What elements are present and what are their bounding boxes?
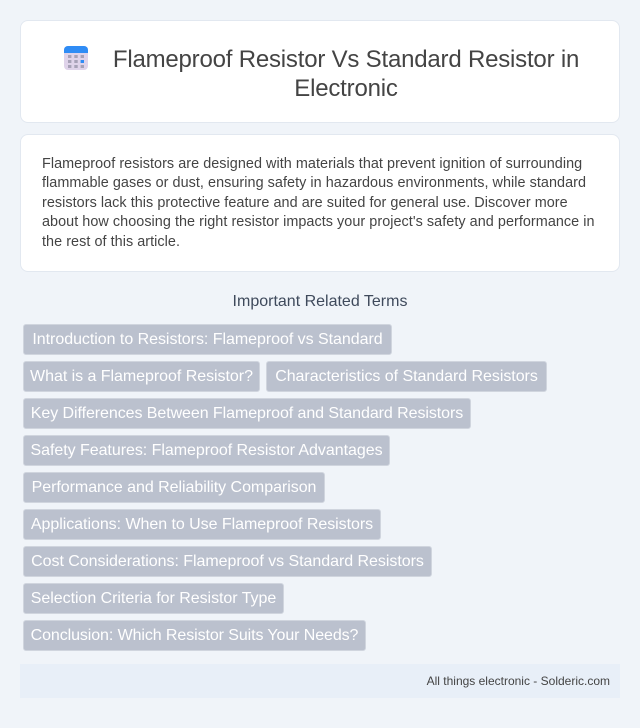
panel: description xyxy=(20,134,620,272)
tag xyxy=(23,509,381,540)
heading: related terms: Important Related Terms xyxy=(233,293,407,310)
panel: header xyxy=(20,20,620,123)
footer: All things electronic - Solderic.com xyxy=(427,674,610,688)
title: Flameproof Resistor Vs Standard Resistor in xyxy=(113,46,579,73)
icon: calendar xyxy=(64,46,88,70)
tag xyxy=(23,472,325,503)
text block: description: Flameproof resistors are designed with materials that prevent ignition of surrounding xyxy=(42,156,582,172)
title: Electronic xyxy=(294,75,398,102)
text block: description: about how choosing the right resistor impacts your project's safety and performance in xyxy=(42,214,595,230)
text block: description: the rest of this article. xyxy=(42,234,180,250)
tag xyxy=(23,324,392,355)
tag: What is a Flameproof Resistor? xyxy=(30,368,253,385)
tag: Selection Criteria for Resistor Type xyxy=(31,590,276,607)
tag: Introduction to Resistors: Flameproof vs Standard xyxy=(32,331,383,348)
tag: Conclusion: Which Resistor Suits Your Needs? xyxy=(31,627,358,644)
text block: description xyxy=(42,156,595,250)
tag xyxy=(23,435,390,466)
tag: Safety Features: Flameproof Resistor Advantages xyxy=(30,442,383,459)
tag xyxy=(23,398,471,429)
tag: Cost Considerations: Flameproof vs Standard Resistors xyxy=(31,553,424,570)
tag xyxy=(23,546,432,577)
tag xyxy=(23,620,366,651)
tag xyxy=(266,361,547,392)
tag: Key Differences Between Flameproof and Standard Resistors xyxy=(31,405,463,422)
title xyxy=(113,46,579,102)
tag: Characteristics of Standard Resistors xyxy=(275,368,538,385)
tag: Performance and Reliability Comparison xyxy=(32,479,316,496)
text block: description: resistors lack this protective feature and are suited for general use. Discover more xyxy=(42,195,568,211)
footer xyxy=(20,664,620,698)
tag xyxy=(23,583,284,614)
text block: description: flammable gases or dust, ensuring safety in hazardous environments, while standard xyxy=(42,175,586,191)
tag xyxy=(23,361,260,392)
tag: Applications: When to Use Flameproof Resistors xyxy=(31,516,373,533)
